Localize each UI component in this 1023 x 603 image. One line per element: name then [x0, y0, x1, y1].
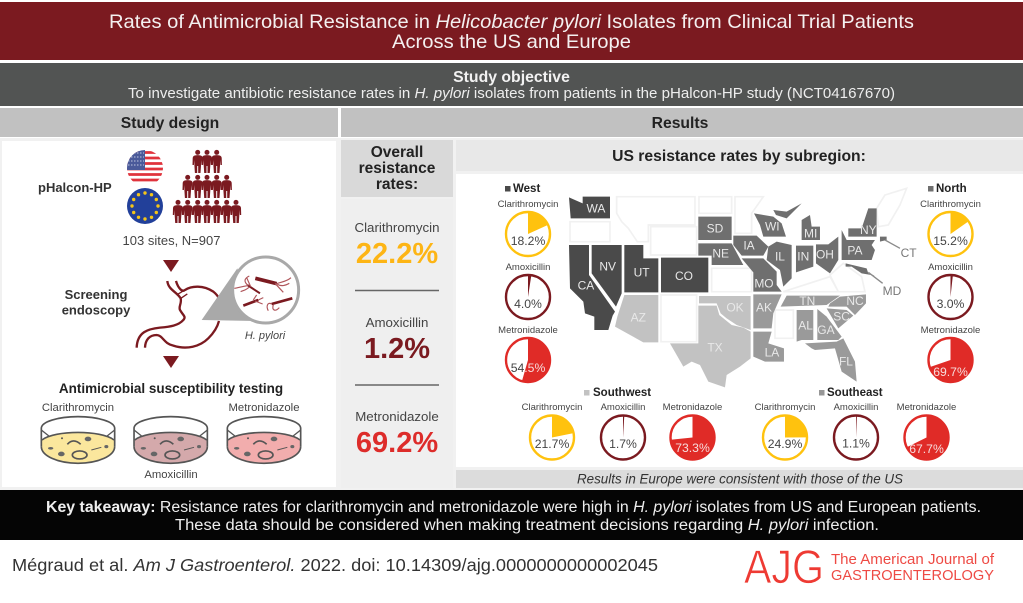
- study objective banner: Study objective: [453, 69, 570, 86]
- region: Southeast: Amoxicillin: [834, 402, 878, 413]
- results heading: Results: [652, 115, 709, 132]
- pie: Southeast amoxicillin 1.1%: 1.1%: [842, 436, 870, 450]
- note: results in Europe: [456, 470, 1023, 488]
- region: North: Amoxicillin: [928, 262, 973, 273]
- logo: American Journal of Gastroenterology: [744, 540, 995, 593]
- region: North: Clarithromycin: [920, 199, 981, 210]
- pie: Southwest metronidazole 73.3%: 73.3%: [675, 441, 710, 455]
- title banner: [0, 2, 1023, 60]
- map of US states: FL: [839, 355, 853, 369]
- map of US states: CA: [578, 279, 594, 293]
- pie: West clarithromycin 18.2%: 18.2%: [511, 234, 545, 248]
- region: North: North: [936, 183, 967, 195]
- label: screening endoscopy: Screening: [65, 287, 127, 302]
- map of US states: AZ: [631, 311, 646, 325]
- pie: North amoxicillin 3.0%: [928, 275, 972, 319]
- map of US states: LA: [765, 345, 779, 359]
- label: clarithromycin dish: Clarithromycin: [42, 402, 114, 414]
- icon: stomach: [137, 281, 219, 348]
- map of US states: AL: [798, 319, 813, 333]
- panel: study design: [2, 141, 336, 487]
- panel: overall resistance rates: Overall: [371, 144, 423, 161]
- map of US states: NV: [599, 260, 616, 274]
- map of US states: SD: [707, 221, 724, 235]
- pie: West amoxicillin 4.0%: 4.0%: [514, 297, 542, 311]
- map of US states: OK: [726, 301, 744, 315]
- pie: Southwest metronidazole 73.3%: [670, 416, 714, 460]
- pie: Southeast metronidazole 67.7%: 67.7%: [909, 442, 944, 456]
- panel: overall resistance rates: [341, 140, 453, 488]
- map of US states: GA: [817, 323, 835, 337]
- label: pHalcon-HP: pHalcon-HP: [38, 180, 112, 195]
- map of US states: MI: [804, 226, 817, 240]
- stat: amoxicillin: 1.2%: [364, 333, 430, 365]
- pie: North clarithromycin 15.2%: [928, 212, 972, 256]
- pie: Southwest clarithromycin 21.7%: [530, 416, 574, 460]
- heading: antimicrobial susceptibility testing: Antimicrobial susceptibility testing: [59, 381, 283, 396]
- study objective banner: To investigate antibiotic resistance rates in H. pylori isolates from patients in the pHalcon-HP study (NCT04167670): [128, 86, 895, 102]
- pie: Southwest amoxicillin 1.7%: 1.7%: [609, 437, 637, 451]
- region: West: Amoxicillin: [506, 262, 550, 273]
- study design heading: [0, 108, 338, 137]
- stat: clarithromycin: [355, 220, 439, 270]
- results heading: [341, 108, 1023, 137]
- pie: West metronidazole 54.5%: 54.5%: [511, 361, 545, 375]
- key takeaway banner: [0, 490, 1023, 540]
- pie: West metronidazole 54.5%: [506, 338, 550, 382]
- region: Southwest: [522, 387, 722, 460]
- pie: Southeast amoxicillin 1.1%: [834, 416, 878, 460]
- pie: North amoxicillin 3.0%: 3.0%: [937, 297, 965, 311]
- stat: amoxicillin: Amoxicillin: [366, 315, 428, 330]
- region: Southwest: Amoxicillin: [601, 402, 645, 413]
- logo: American Journal of Gastroenterology: GASTROENTEROLOGY: [831, 568, 994, 584]
- citation: Mégraud et al. Am J Gastroenterol. 2022. doi: 10.14309/ajg.0000000000002045: [12, 555, 658, 575]
- stat: clarithromycin: Clarithromycin: [355, 220, 439, 235]
- region: North: [920, 183, 981, 382]
- panel: US subregion results: [456, 174, 1023, 467]
- region: Southeast: Southeast: [827, 387, 883, 399]
- label: amoxicillin dish: Amoxicillin: [144, 469, 198, 481]
- pie: Southeast metronidazole 67.7%: [904, 416, 948, 460]
- map of US states: WA: [587, 201, 605, 215]
- stat: metronidazole: [355, 409, 439, 459]
- panel: overall resistance rates: resistance: [359, 160, 436, 177]
- region: West: [498, 183, 558, 382]
- map of US states: SC: [833, 310, 850, 324]
- note: results in Europe: Results in Europe were consistent with those of the US: [577, 472, 903, 486]
- pie: North metronidazole 69.7%: [928, 338, 972, 382]
- icon: patient group: [173, 150, 241, 223]
- title banner: Rates of Antimicrobial Resistance in Helicobacter pylori Isolates from Clinical Trial Patients: [109, 11, 914, 33]
- logo: American Journal of Gastroenterology: AJG: [744, 540, 824, 593]
- map of US states: AK: [756, 301, 772, 315]
- icon: EU flag: [127, 188, 163, 224]
- map of US states: MO: [754, 276, 774, 290]
- heading: US resistance rates by subregion: US resistance rates by subregion:: [612, 148, 866, 165]
- map of US states: NE: [712, 246, 729, 260]
- label: H. pylori: H. pylori: [245, 330, 286, 342]
- icon: US flag: [127, 150, 163, 182]
- map of US states: OH: [816, 247, 834, 261]
- pie: Southwest clarithromycin 21.7%: 21.7%: [535, 437, 569, 451]
- map of US states: WI: [765, 220, 780, 234]
- pie: West amoxicillin 4.0%: [506, 275, 550, 319]
- pie: West clarithromycin 18.2%: [506, 212, 550, 256]
- text: sites and patients: 103 sites, N=907: [123, 233, 220, 248]
- arrow: down to screening: [163, 260, 179, 272]
- map of US states: UT: [634, 265, 650, 279]
- pie: Southeast clarithromycin 24.9%: 24.9%: [768, 437, 802, 451]
- map of US states: NC: [846, 294, 864, 308]
- stat: clarithromycin: 22.2%: [356, 238, 438, 270]
- title banner: Across the US and Europe: [392, 31, 631, 53]
- icon: H. pylori magnifier: [202, 257, 299, 323]
- region: West: Clarithromycin: [498, 199, 558, 210]
- map of US states: TX: [707, 340, 723, 354]
- region: Southeast: [755, 387, 956, 460]
- map of US states: CO: [675, 269, 693, 283]
- pie: Southwest amoxicillin 1.7%: [601, 416, 645, 460]
- arrow: down to testing: [163, 356, 179, 368]
- key takeaway banner: Key takeaway: Resistance rates for clarithromycin and metronidazole were high in H. pylori isolates from US and European patients.: [46, 499, 981, 516]
- map of US states: [569, 188, 917, 387]
- map of US states: MD: [883, 284, 902, 298]
- study objective banner: [0, 63, 1023, 106]
- map of US states: TN: [799, 294, 815, 308]
- region: West: Metronidazole: [498, 325, 558, 336]
- stat: metronidazole: Metronidazole: [355, 409, 439, 424]
- region: Southwest: Clarithromycin: [522, 402, 582, 413]
- stat: amoxicillin: [364, 315, 430, 365]
- region: West: West: [513, 183, 540, 195]
- icon: clarithromycin petri dish: [41, 417, 115, 463]
- study design heading: Study design: [121, 115, 219, 132]
- region: Southeast: Clarithromycin: [755, 402, 815, 413]
- map of US states: NY: [860, 223, 877, 237]
- region: Southeast: Metronidazole: [897, 402, 956, 413]
- pie: North metronidazole 69.7%: 69.7%: [933, 365, 968, 379]
- label: metronidazole dish: Metronidazole: [229, 402, 299, 414]
- map of US states: IN: [797, 250, 809, 264]
- region: Southwest: Metronidazole: [663, 402, 722, 413]
- stat: metronidazole: 69.2%: [356, 427, 438, 459]
- region: Southwest: Southwest: [593, 387, 651, 399]
- heading: US resistance rates by subregion: [456, 140, 1023, 171]
- panel: overall resistance rates: rates:: [376, 176, 418, 193]
- map of US states: CT: [901, 246, 917, 260]
- map of US states: PA: [847, 244, 863, 258]
- map of US states: IA: [743, 239, 755, 253]
- map of US states: IL: [775, 250, 785, 264]
- icon: metronidazole petri dish: [227, 417, 301, 463]
- icon: amoxicillin petri dish: [134, 417, 207, 463]
- pie: North clarithromycin 15.2%: 15.2%: [933, 234, 968, 248]
- pie: Southeast clarithromycin 24.9%: [763, 416, 807, 460]
- logo: American Journal of Gastroenterology: The American Journal of: [831, 552, 995, 568]
- label: screening endoscopy: endoscopy: [62, 302, 131, 318]
- key takeaway banner: These data should be considered when making treatment decisions regarding H. pylori infection.: [175, 517, 879, 534]
- region: North: Metronidazole: [921, 325, 980, 336]
